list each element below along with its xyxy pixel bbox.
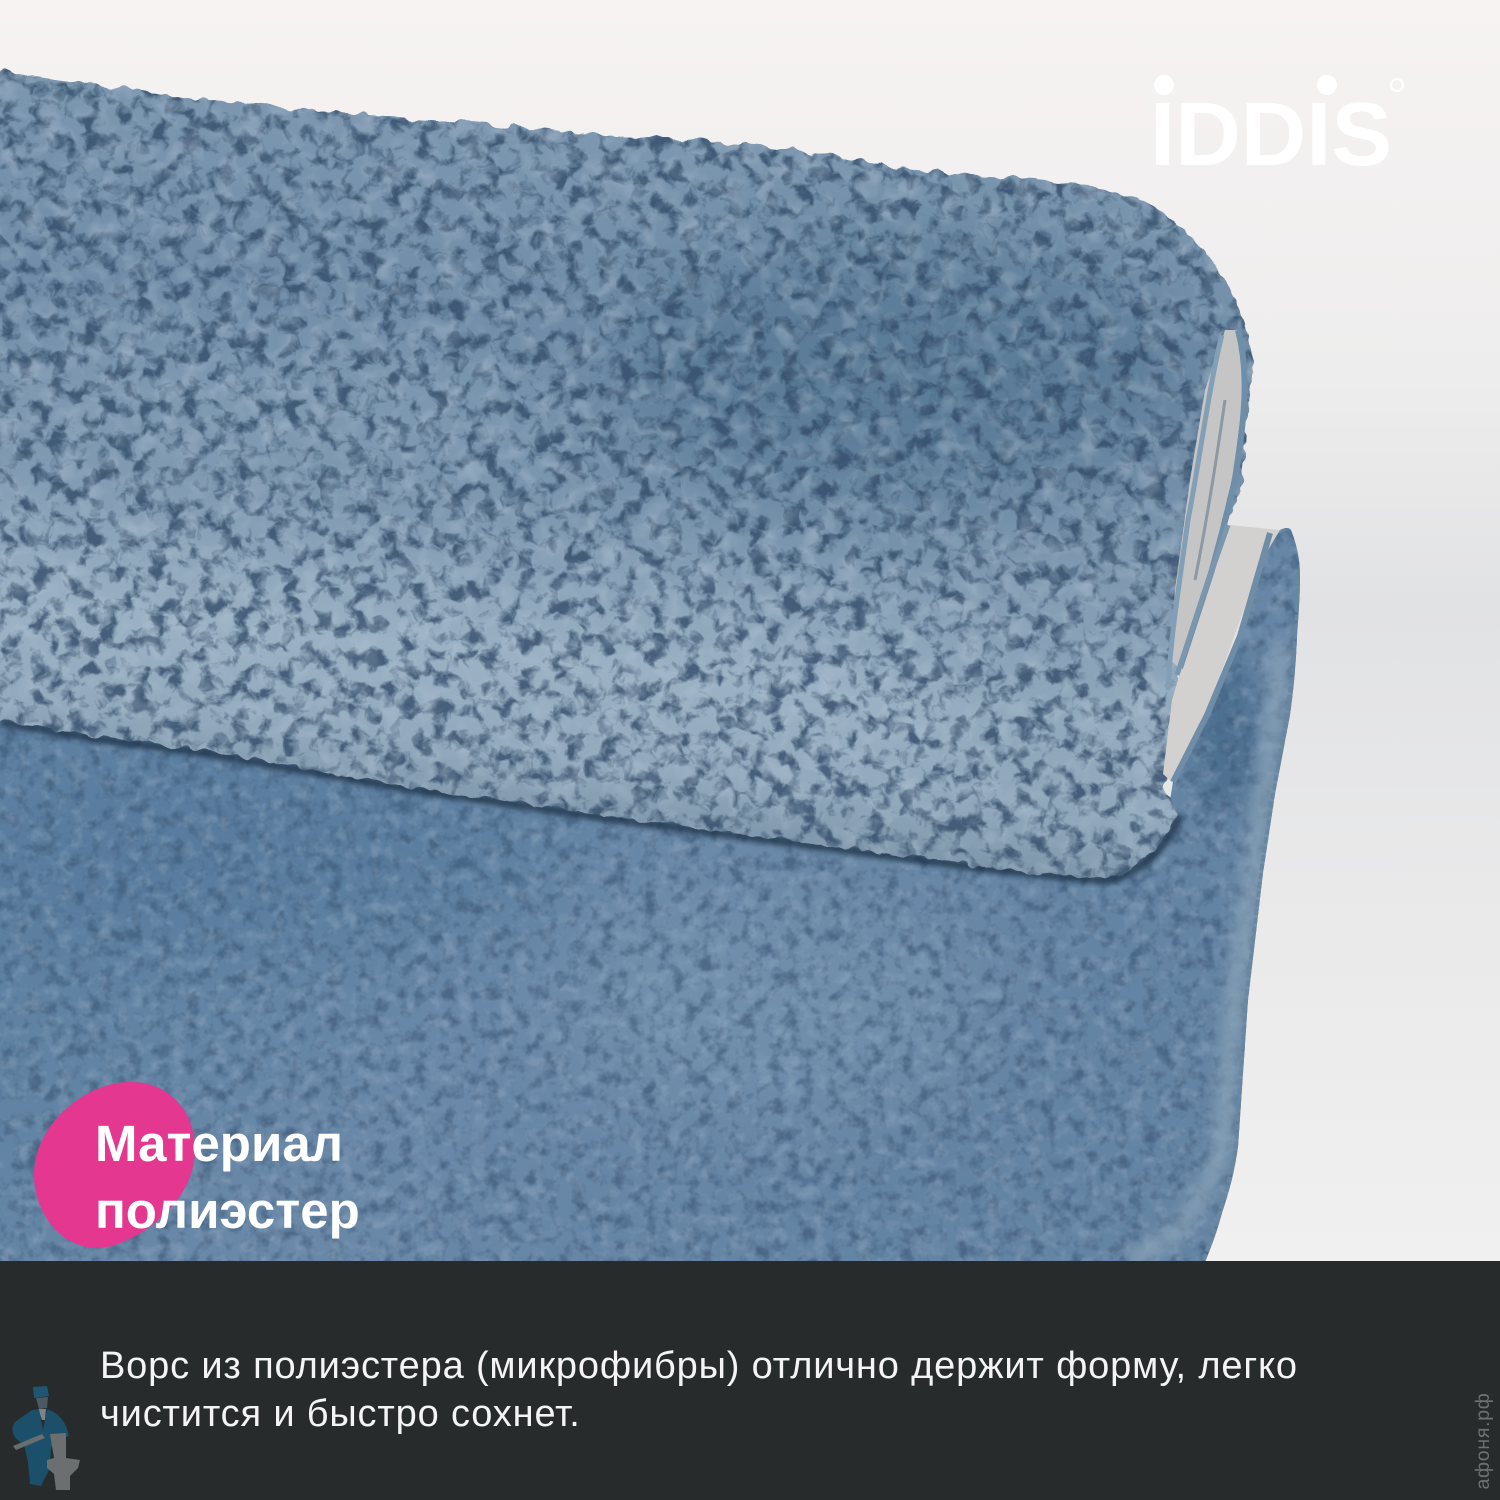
decorative pink blob behind heading — [34, 1082, 195, 1248]
brand logo: IDDIS — [1150, 85, 1392, 185]
heading: material: Материал — [95, 1115, 343, 1172]
heading: material — [95, 1115, 360, 1239]
description text — [100, 1345, 1298, 1435]
description text: чистится и быстро сохнет. — [100, 1393, 581, 1435]
underside backing of the mat — [1163, 330, 1280, 782]
site watermark: афоня.рф — [1472, 1393, 1494, 1489]
flat part of the mat — [0, 528, 1300, 1261]
bottom dark panel — [0, 1261, 1500, 1500]
rolled part of the mat — [0, 68, 1254, 879]
description text: Ворс из полиэстера (микрофибры) отлично держит форму, легко — [100, 1345, 1298, 1387]
heading: material: полиэстер — [95, 1182, 360, 1239]
icon: plumber with toilet — [12, 1386, 80, 1490]
